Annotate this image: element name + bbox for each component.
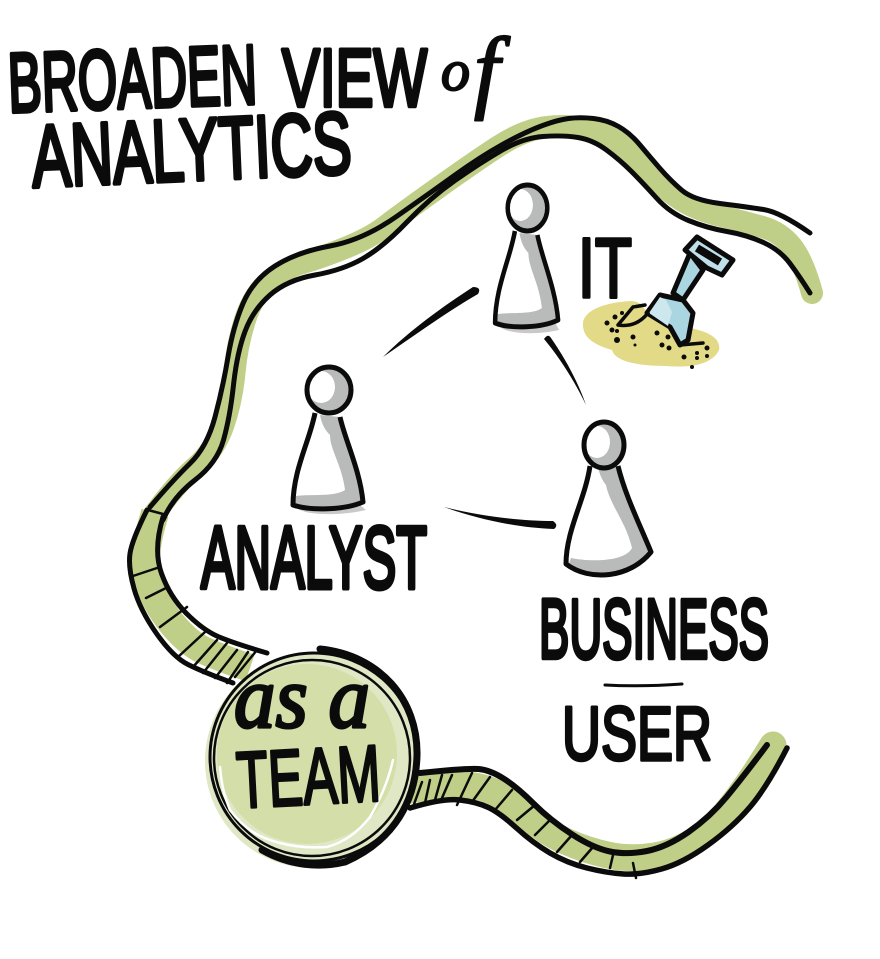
title: o	[441, 38, 470, 103]
pawn: analyst	[293, 367, 366, 514]
icon: shovel in sand	[583, 237, 733, 369]
connector: analyst to IT	[383, 287, 479, 357]
black outlines of upper band	[150, 118, 810, 520]
badge: as a team: TEAM	[234, 729, 383, 825]
title: f	[474, 19, 511, 121]
badge: as a team	[205, 649, 419, 868]
black outlines of left band section	[130, 510, 267, 683]
badge: as a team: as a	[234, 650, 370, 747]
title: BROADEN	[6, 27, 258, 130]
label: Business User	[539, 582, 769, 777]
green band: upper network loop	[150, 126, 812, 520]
tick marks on left band	[133, 510, 257, 683]
pawn: IT	[495, 185, 559, 333]
green band: left section to badge	[146, 513, 250, 668]
pawn: business user	[566, 422, 651, 575]
title: VIEW	[282, 33, 427, 124]
label: Business User: USER	[562, 692, 712, 777]
label: IT: IT	[578, 221, 632, 315]
black outlines of lower band	[410, 745, 787, 874]
label: Analyst: ANALYST	[201, 508, 427, 607]
connector: analyst to business user	[444, 507, 556, 529]
title: ANALYTICS	[30, 93, 354, 206]
tick marks on lower band	[413, 773, 636, 878]
title	[6, 19, 511, 206]
green band: lower section to end	[410, 745, 773, 858]
connector: IT to business user	[544, 336, 586, 405]
